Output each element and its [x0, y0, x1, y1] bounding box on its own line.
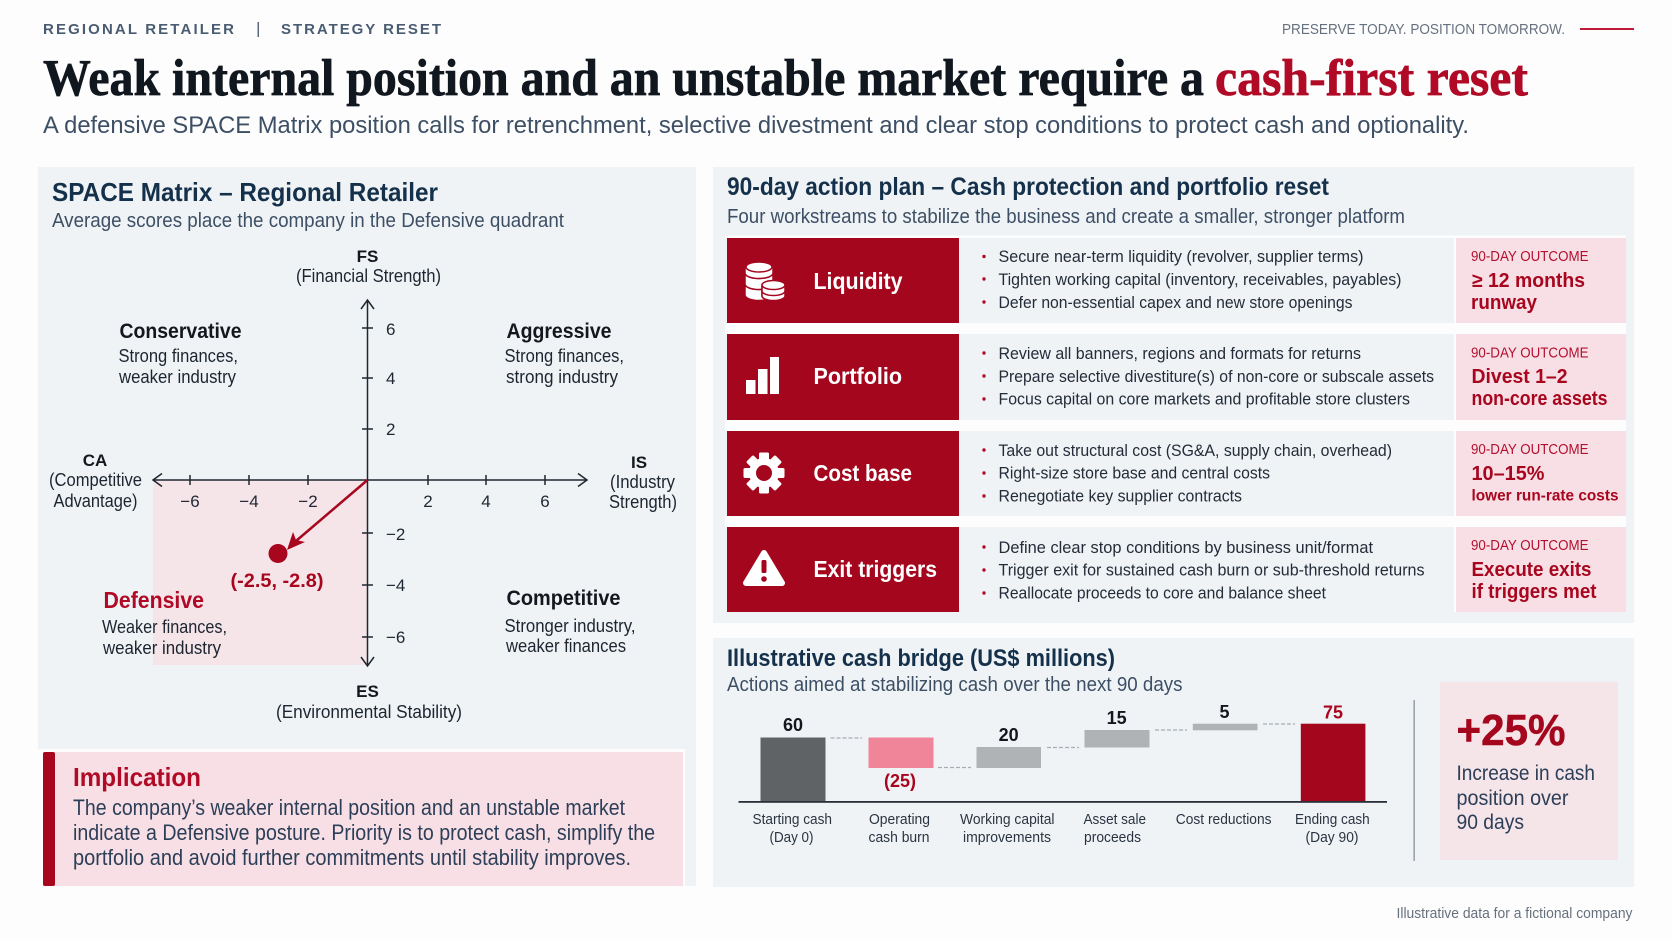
axis label: CA: CA	[83, 451, 107, 470]
outcome: Execute exits	[1472, 559, 1592, 581]
workstream: Portfolio: Portfolio	[814, 363, 902, 389]
outcome: lower run-rate costs	[1472, 488, 1619, 504]
bridge subheading: Actions aimed at stabilizing cash over the next 90 days	[727, 674, 1182, 696]
bullet list: Defer non-essential capex and new store openings	[998, 293, 1352, 312]
outcome	[1456, 238, 1626, 323]
axis label: IS: (Industry	[610, 472, 675, 492]
KPI callout: 90 days	[1456, 811, 1524, 834]
outcome: non-core assets	[1472, 388, 1608, 410]
bullet list: Define clear stop conditions by business unit/format	[998, 538, 1373, 557]
KPI callout	[1440, 682, 1618, 860]
axis tick labels: −6	[386, 628, 405, 647]
workstream: Cost base	[727, 431, 1626, 516]
axis label: FS: FS	[357, 247, 378, 266]
axis tick labels: 2	[423, 492, 433, 511]
axis tick labels: 4	[481, 492, 491, 511]
KPI callout: +25%	[1456, 706, 1566, 755]
action plan heading: 90-day action plan – Cash protection and portfolio reset	[727, 173, 1330, 201]
icon: coins	[745, 262, 785, 300]
quadrant: Competitive: Stronger industry,	[504, 616, 636, 636]
quadrant: Aggressive: Strong finances,	[504, 346, 624, 366]
axis label: IS: Strength)	[609, 492, 677, 512]
axis label: CA	[49, 451, 142, 511]
axis label: FS: (Financial Strength)	[296, 266, 441, 286]
axis tick labels: 6	[386, 320, 395, 339]
bar values: 5	[1219, 702, 1230, 722]
quadrant: Conservative: Strong finances,	[118, 346, 238, 366]
category labels: Cost reductions	[1176, 812, 1272, 828]
category labels: Starting cash	[752, 812, 832, 828]
bar values: 20	[999, 725, 1019, 745]
category labels: Asset sale	[1084, 812, 1146, 828]
icon: bar chart	[746, 357, 779, 394]
outcome: 90-DAY OUTCOME	[1471, 249, 1589, 265]
category labels: Ending cash	[1295, 812, 1370, 828]
action plan subheading: Four workstreams to stabilize the business and create a smaller, stronger platform	[727, 206, 1405, 228]
icon: warning	[746, 553, 782, 583]
bullet list	[982, 247, 1402, 312]
bullet list: Trigger exit for sustained cash burn or sub-threshold returns	[998, 560, 1424, 580]
axis tick labels: −6	[180, 492, 200, 511]
outcome	[1456, 527, 1626, 612]
category labels: (Day 90)	[1306, 830, 1358, 846]
bullet list	[982, 538, 1424, 602]
bullet list: Prepare selective divestiture(s) of non-core or subscale assets	[998, 367, 1434, 386]
axis tick labels: 6	[540, 492, 550, 511]
workstream: Cost base: Cost base	[814, 460, 912, 486]
outcome: if triggers met	[1472, 581, 1597, 603]
bullet list: Review all banners, regions and formats for returns	[998, 344, 1361, 363]
quadrant: Defensive: Weaker finances,	[102, 617, 227, 637]
outcome: 90-DAY OUTCOME	[1471, 346, 1589, 362]
quadrant: Defensive: weaker industry	[102, 638, 221, 658]
workstream: Exit triggers: Exit triggers	[814, 556, 937, 582]
quadrant: Defensive: Defensive	[104, 587, 204, 613]
workstream: Portfolio	[727, 334, 1626, 420]
panel: action plan	[713, 167, 1634, 623]
callout: implication: The company’s weaker internal position and an unstable market	[73, 795, 625, 820]
quadrant: Aggressive: Aggressive	[506, 319, 612, 343]
waterfall bars	[760, 724, 1365, 802]
bullet list: Take out structural cost (SG&A, supply chain, overhead)	[998, 441, 1392, 460]
bar values	[783, 702, 1343, 791]
category labels: proceeds	[1084, 830, 1141, 846]
outcome: runway	[1471, 292, 1538, 314]
KPI callout: Increase in cash	[1456, 762, 1595, 785]
outcome	[1456, 334, 1626, 420]
callout: implication: Implication	[73, 762, 201, 792]
outcome: ≥ 12 months	[1472, 270, 1585, 292]
category labels: Operating	[869, 812, 930, 828]
quadrant: Conservative: weaker industry	[118, 367, 236, 387]
KPI callout: position over	[1456, 787, 1568, 810]
quadrant: Defensive	[102, 587, 227, 658]
axis label: ES: ES	[356, 682, 379, 701]
position arrow and marker	[230, 480, 368, 592]
bullet list	[982, 441, 1392, 506]
callout: implication: portfolio and avoid further commitments until stability improves.	[73, 845, 631, 870]
category labels	[752, 812, 1370, 846]
callout: implication: indicate a Defensive posture. Priority is to protect cash, simplify the	[73, 820, 655, 845]
quadrant: Competitive	[504, 586, 636, 656]
row separators	[725, 236, 1626, 612]
quadrant: Competitive: weaker finances	[505, 636, 626, 656]
category labels: Working capital	[960, 812, 1054, 828]
matrix subheading: Average scores place the company in the Defensive quadrant	[52, 210, 564, 232]
bullet list: Tighten working capital (inventory, receivables, payables)	[998, 270, 1402, 289]
axis label: CA: (Competitive	[49, 470, 142, 490]
axis tick labels: −4	[239, 492, 259, 511]
axis tick labels: 4	[386, 369, 395, 388]
axis tick labels: 2	[386, 420, 395, 439]
outcome: 90-DAY OUTCOME	[1471, 442, 1589, 458]
axis tick labels	[180, 320, 550, 647]
outcome	[1456, 431, 1626, 516]
bullet list: Secure near-term liquidity (revolver, supplier terms)	[998, 247, 1364, 266]
category labels: improvements	[963, 830, 1051, 846]
axis label: CA: Advantage)	[54, 491, 138, 511]
category labels: cash burn	[868, 830, 930, 846]
category labels: (Day 0)	[770, 830, 814, 846]
bridge heading: Illustrative cash bridge (US$ millions)	[727, 645, 1115, 672]
axis tick labels: −2	[386, 525, 405, 544]
header tagline: PRESERVE TODAY. POSITION TOMORROW.	[1282, 21, 1565, 38]
bar values: 60	[783, 715, 803, 735]
outcome: 90-DAY OUTCOME	[1471, 538, 1589, 554]
axis tick labels: −4	[386, 576, 405, 595]
axis label: ES: (Environmental Stability)	[276, 702, 462, 722]
panel: cash bridge	[713, 638, 1634, 887]
axis label: FS	[296, 247, 441, 286]
bullet list: Focus capital on core markets and profitable store clusters	[998, 390, 1410, 408]
axis tick labels: −2	[298, 492, 318, 511]
matrix heading: SPACE Matrix – Regional Retailer	[52, 177, 438, 207]
workstream: Exit triggers	[727, 527, 1626, 612]
defensive quadrant shading	[153, 480, 368, 665]
workstream: Liquidity: Liquidity	[814, 268, 902, 294]
quadrant: Conservative	[118, 319, 242, 387]
bar values: (25)	[884, 771, 916, 791]
quadrant: Conservative: Conservative	[120, 319, 242, 343]
axes	[153, 300, 587, 666]
bullet list	[982, 344, 1434, 408]
bar values: 15	[1107, 708, 1127, 728]
title: Weak internal position and an unstable market require a	[43, 50, 1204, 107]
header eyebrow: STRATEGY RESET	[281, 21, 441, 38]
bullet list: Right-size store base and central costs	[998, 464, 1270, 482]
waterfall chart	[738, 702, 1387, 846]
position arrow and marker: (-2.5, -2.8)	[230, 571, 324, 592]
header eyebrow	[43, 21, 441, 38]
outcome: 10–15%	[1472, 463, 1545, 485]
quadrant: Competitive: Competitive	[506, 586, 621, 610]
icon: gear	[744, 452, 784, 494]
bullet list: Renegotiate key supplier contracts	[998, 486, 1242, 506]
axis label: IS	[609, 453, 677, 512]
panel: SPACE matrix	[38, 167, 696, 886]
bullet list: Reallocate proceeds to core and balance sheet	[998, 584, 1326, 602]
header eyebrow: REGIONAL RETAILER	[43, 21, 234, 38]
quadrant: Aggressive	[504, 319, 624, 387]
outcome: Divest 1–2	[1472, 366, 1568, 388]
bar values: 75	[1323, 702, 1343, 722]
subtitle: A defensive SPACE Matrix position calls for retrenchment, selective divestment and clear stop conditions to protect cash and optionality.	[43, 112, 1469, 139]
workstream: Liquidity	[727, 238, 1626, 323]
quadrant: Aggressive: strong industry	[506, 367, 618, 387]
axis label: IS: IS	[631, 453, 647, 472]
title: cash-first reset	[1215, 50, 1529, 107]
axis label: ES	[276, 682, 462, 722]
callout: implication	[38, 749, 685, 886]
footnote: Illustrative data for a fictional company	[1396, 906, 1633, 922]
